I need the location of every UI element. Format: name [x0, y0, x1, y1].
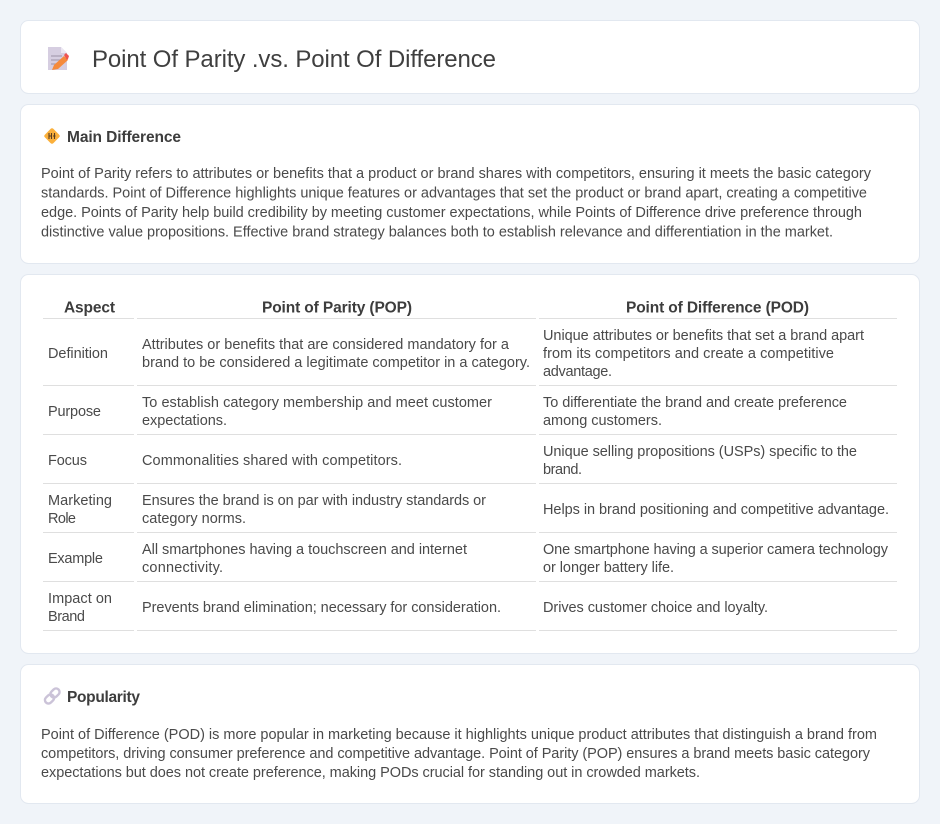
table header row [64, 300, 809, 316]
table row: focus: Commonalities shared with competitors. [142, 453, 402, 469]
table row: impact on brand: Drives customer choice and loyalty. [543, 600, 768, 616]
table row: example: or longer battery life. [543, 560, 674, 576]
text block: main difference paragraph [41, 166, 872, 240]
table row: marketing role [48, 493, 889, 527]
table row: definition: from its competitors and create a competitive [543, 346, 834, 362]
table row: impact on brand: Brand [48, 609, 85, 625]
table row: marketing role: Role [48, 511, 76, 527]
table row: purpose: Purpose [48, 404, 101, 420]
text block: main difference paragraph: standards. Point of Difference highlights unique features or advantages that set the product or brand apart, creating a competitive [41, 186, 867, 202]
table row: example: connectivity. [142, 560, 223, 576]
table row: purpose [48, 395, 847, 429]
table row: focus: Unique selling propositions (USPs) specific to the [543, 444, 857, 460]
table row: focus: Focus [48, 453, 87, 469]
heading: popularity: Popularity [67, 689, 140, 706]
table header row: Aspect [64, 300, 115, 316]
icon: orange diamond sign [44, 128, 60, 144]
table row: example: Example [48, 551, 103, 567]
table header row: Point of Parity (POP) [262, 300, 412, 316]
table row: definition [48, 328, 864, 380]
icon: chain link [43, 687, 61, 705]
table row: definition: Unique attributes or benefits that set a brand apart [543, 328, 864, 344]
title: Point Of Parity .vs. Point Of Difference [92, 46, 496, 73]
panel: popularity [20, 664, 920, 804]
table row: definition: Attributes or benefits that are considered mandatory for a [142, 337, 510, 353]
table row: impact on brand: Impact on [48, 591, 112, 607]
table row: impact on brand [48, 591, 768, 625]
table row: marketing role: Ensures the brand is on par with industry standards or [142, 493, 486, 509]
text block: popularity paragraph: expectations but does not create preference, making PODs crucial for standing out in crowded markets. [41, 765, 700, 781]
table row: marketing role: category norms. [142, 511, 246, 527]
table row: example [48, 542, 889, 576]
table header row: Point of Difference (POD) [626, 300, 809, 316]
table row: purpose: To differentiate the brand and create preference [543, 395, 847, 411]
table row: marketing role: Helps in brand positioning and competitive advantage. [543, 502, 889, 518]
text block: popularity paragraph: competitors, driving consumer preference and competitive advantage. Point of Parity (POP) ensures a brand meets basic category [41, 746, 871, 762]
text block: popularity paragraph [41, 727, 877, 781]
table row: purpose: expectations. [142, 413, 227, 429]
table row: definition: brand to be considered a legitimate competitor in a category. [142, 355, 530, 371]
panel: main difference [20, 104, 920, 264]
panel: title header [20, 20, 920, 94]
icon: document with pencil [48, 47, 69, 70]
table row: definition: Definition [48, 346, 108, 362]
text block: popularity paragraph: Point of Difference (POD) is more popular in marketing because it highlights unique product attributes that distinguish a brand from [41, 727, 877, 743]
table row: marketing role: Marketing [48, 493, 112, 509]
text block: main difference paragraph: distinctive value propositions. Effective brand strategy balances both to establish relevance and differentiation in the market. [41, 224, 833, 240]
table row: example: All smartphones having a touchscreen and internet [142, 542, 467, 558]
panel: comparison table [20, 274, 920, 654]
table row: focus: brand. [543, 462, 582, 478]
table row: focus [48, 444, 857, 478]
text block: main difference paragraph: Point of Parity refers to attributes or benefits that a product or brand shares with competitors, ensuring it meets the basic category [41, 166, 872, 182]
text block: main difference paragraph: edge. Points of Parity help build credibility by meeting customer expectations, while Points of Difference drive preference through [41, 205, 862, 221]
table row: purpose: among customers. [543, 413, 662, 429]
table row: definition: advantage. [543, 364, 612, 380]
table row: purpose: To establish category membership and meet customer [142, 395, 492, 411]
table row: example: One smartphone having a superior camera technology [543, 542, 889, 558]
heading: main difference: Main Difference [67, 129, 181, 146]
table row: impact on brand: Prevents brand elimination; necessary for consideration. [142, 600, 501, 616]
